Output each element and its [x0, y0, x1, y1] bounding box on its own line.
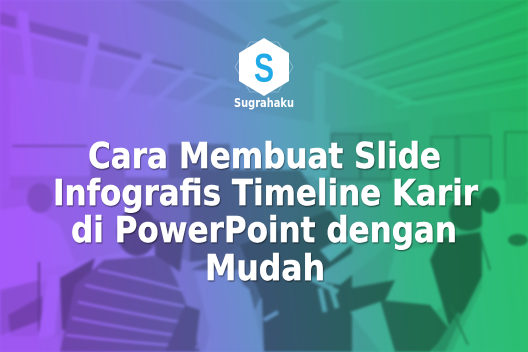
logo wordmark: Sugrahaku [234, 96, 294, 110]
title line 4: Mudah [205, 248, 325, 289]
title line 3: di PowerPoint dengan [71, 210, 457, 251]
title line 1: Cara Membuat Slide [88, 136, 441, 177]
icon: decorative outline hexagons [235, 42, 293, 92]
icon: letter S: S [254, 46, 274, 90]
icon: white hexagon [239, 38, 289, 96]
